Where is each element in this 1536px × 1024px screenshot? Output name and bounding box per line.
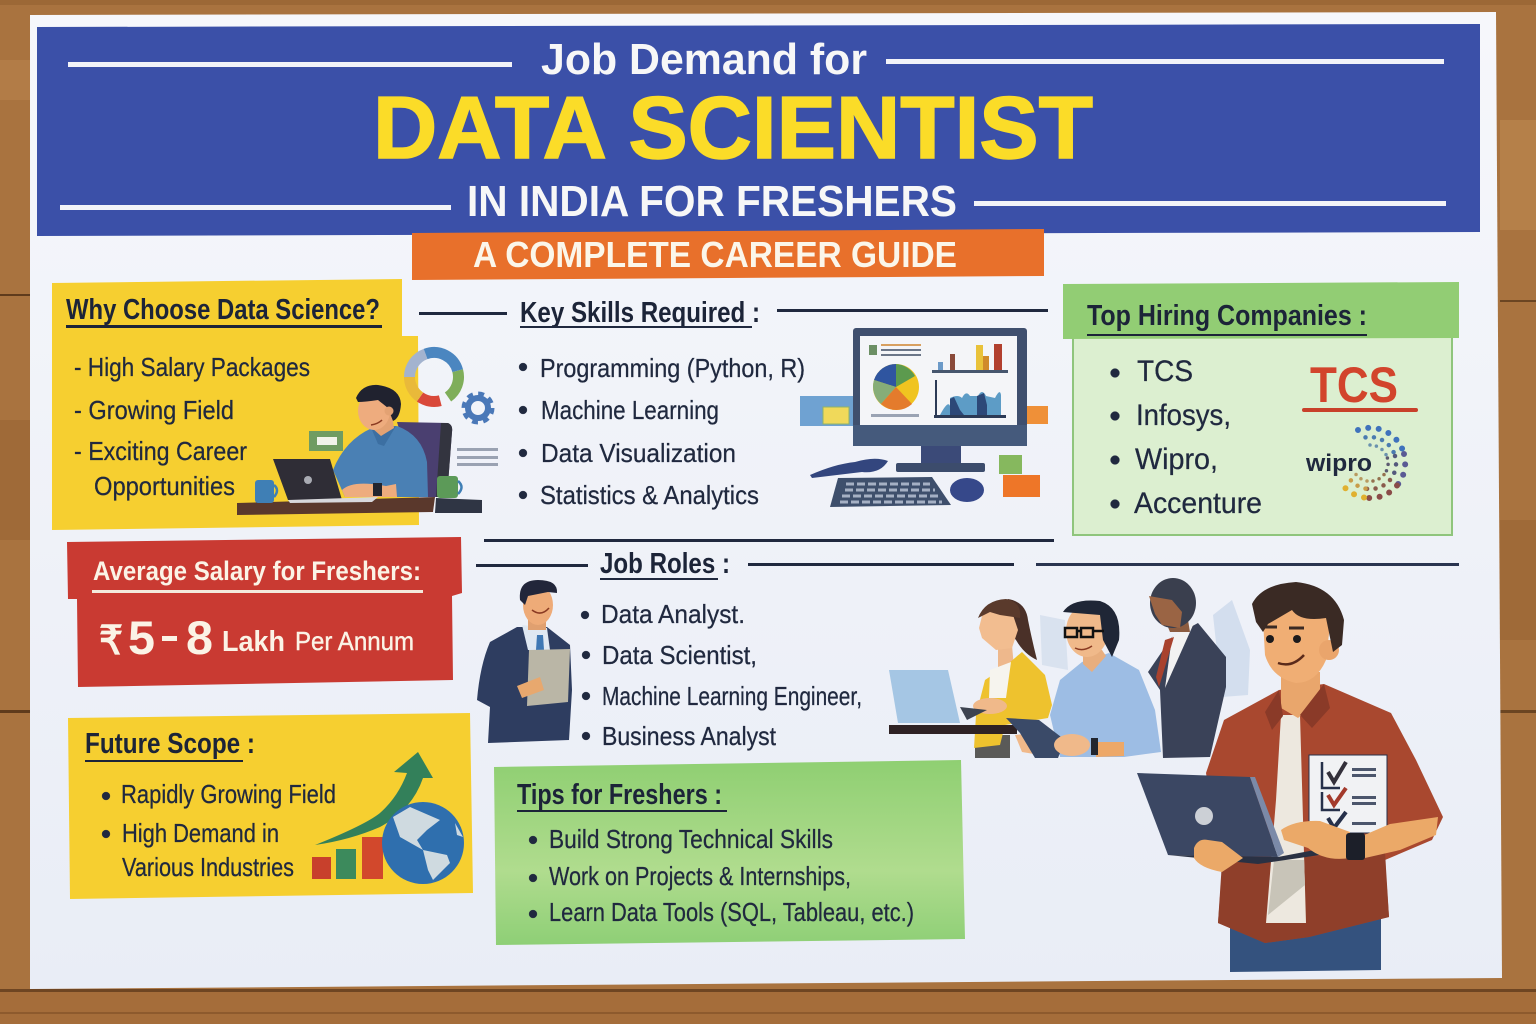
list: job roles: Data Analyst. [601, 599, 745, 629]
list: key skills [519, 353, 805, 510]
head [372, 415, 394, 436]
bar chart [932, 344, 1008, 373]
list: key skills: Data Visualization [541, 438, 736, 468]
panel: top hiring companies [1063, 282, 1459, 535]
collar [1265, 690, 1283, 730]
heading: key skills [419, 297, 1048, 329]
heading: Tips for Freshers : [517, 779, 722, 811]
shirt [333, 426, 428, 497]
area chart [934, 380, 1006, 418]
hands [342, 484, 397, 497]
title line 3: IN INDIA FOR FRESHERS [467, 177, 957, 226]
heading: Top Hiring Companies : [1087, 300, 1367, 332]
heading: key skills: Key Skills Required : [520, 297, 760, 329]
heading: Future Scope : [85, 728, 255, 760]
salary figure: 5 [128, 611, 155, 664]
man in glasses [1050, 600, 1161, 757]
logo: wipro [1305, 428, 1405, 498]
title main: DATA SCIENTIST [373, 78, 1093, 177]
list: Wipro, [1135, 443, 1218, 476]
list: Build Strong Technical Skills [549, 824, 833, 854]
list: - Exciting Career [74, 436, 247, 466]
list: key skills: Machine Learning [541, 395, 719, 425]
shirt [1206, 684, 1443, 943]
list: key skills: Statistics & Analytics [540, 480, 759, 510]
panel: average salary [67, 537, 462, 687]
list: job roles: Business Analyst [602, 721, 777, 751]
forearm [1362, 817, 1438, 858]
list: Opportunities [94, 471, 235, 501]
subtitle ribbon [412, 229, 1044, 280]
list: key skills: Programming (Python, R) [540, 353, 805, 383]
laptop [1137, 773, 1320, 864]
list: Accenture [1134, 487, 1262, 520]
chair [397, 422, 452, 497]
heading: Why Choose Data Science? [66, 294, 380, 326]
heading: job roles [476, 539, 1459, 580]
icon: donut chart and gear [410, 353, 492, 422]
list: job roles [581, 599, 862, 751]
subtitle ribbon: A COMPLETE CAREER GUIDE [473, 234, 957, 275]
panel: why choose data science [52, 279, 419, 530]
salary figure: ₹ [99, 619, 123, 663]
list: TCS [1137, 355, 1193, 388]
checklist [1309, 755, 1387, 833]
pie chart [873, 364, 919, 410]
mugs [255, 480, 274, 503]
title line 1: Job Demand for [541, 35, 867, 84]
list: job roles: Machine Learning Engineer, [602, 681, 862, 711]
list: Learn Data Tools (SQL, Tableau, etc.) [549, 897, 914, 927]
woman in yellow [973, 599, 1052, 758]
neck and head [1252, 582, 1344, 718]
panel: tips for freshers [494, 760, 965, 945]
heading: Average Salary for Freshers: [93, 556, 421, 586]
salary figure: Lakh [222, 626, 285, 658]
list: Infosys, [1136, 399, 1231, 432]
illustration: computer with charts [800, 328, 1048, 507]
list [529, 824, 914, 927]
hands and watch [1281, 821, 1350, 859]
list [1110, 355, 1262, 520]
header banner [37, 24, 1480, 236]
list: High Demand in [122, 818, 279, 848]
laptop and desk [889, 670, 1098, 758]
list: Rapidly Growing Field [121, 779, 336, 809]
background smudges [1040, 615, 1068, 670]
illustration: team of three [889, 578, 1250, 758]
list [74, 352, 310, 501]
man in suit [1148, 578, 1226, 758]
list: Various Industries [122, 852, 294, 882]
illustration: young man with laptop and checklist [1137, 582, 1443, 972]
laptop [273, 459, 342, 500]
icon: growth chart and globe [312, 752, 464, 884]
logo: wipro: wipro [1305, 450, 1372, 477]
panel: average salary: Per Annum [295, 626, 414, 656]
list: - Growing Field [74, 395, 234, 425]
desk [237, 497, 435, 515]
salary figure: 8 [186, 611, 213, 664]
list: - High Salary Packages [74, 352, 310, 382]
undershirt [1266, 715, 1306, 923]
salary figure [99, 611, 285, 664]
illustration: analyst at desk [237, 385, 498, 515]
note [309, 431, 343, 451]
jeans [1230, 910, 1381, 972]
panel: future scope [68, 713, 473, 899]
logo: TCS: TCS [1310, 357, 1398, 413]
list: job roles: Data Scientist, [602, 640, 757, 670]
illustration: businessman with document [477, 580, 572, 743]
heading: job roles: Job Roles : [600, 548, 730, 580]
list [102, 779, 336, 882]
list: Work on Projects & Internships, [549, 861, 851, 891]
